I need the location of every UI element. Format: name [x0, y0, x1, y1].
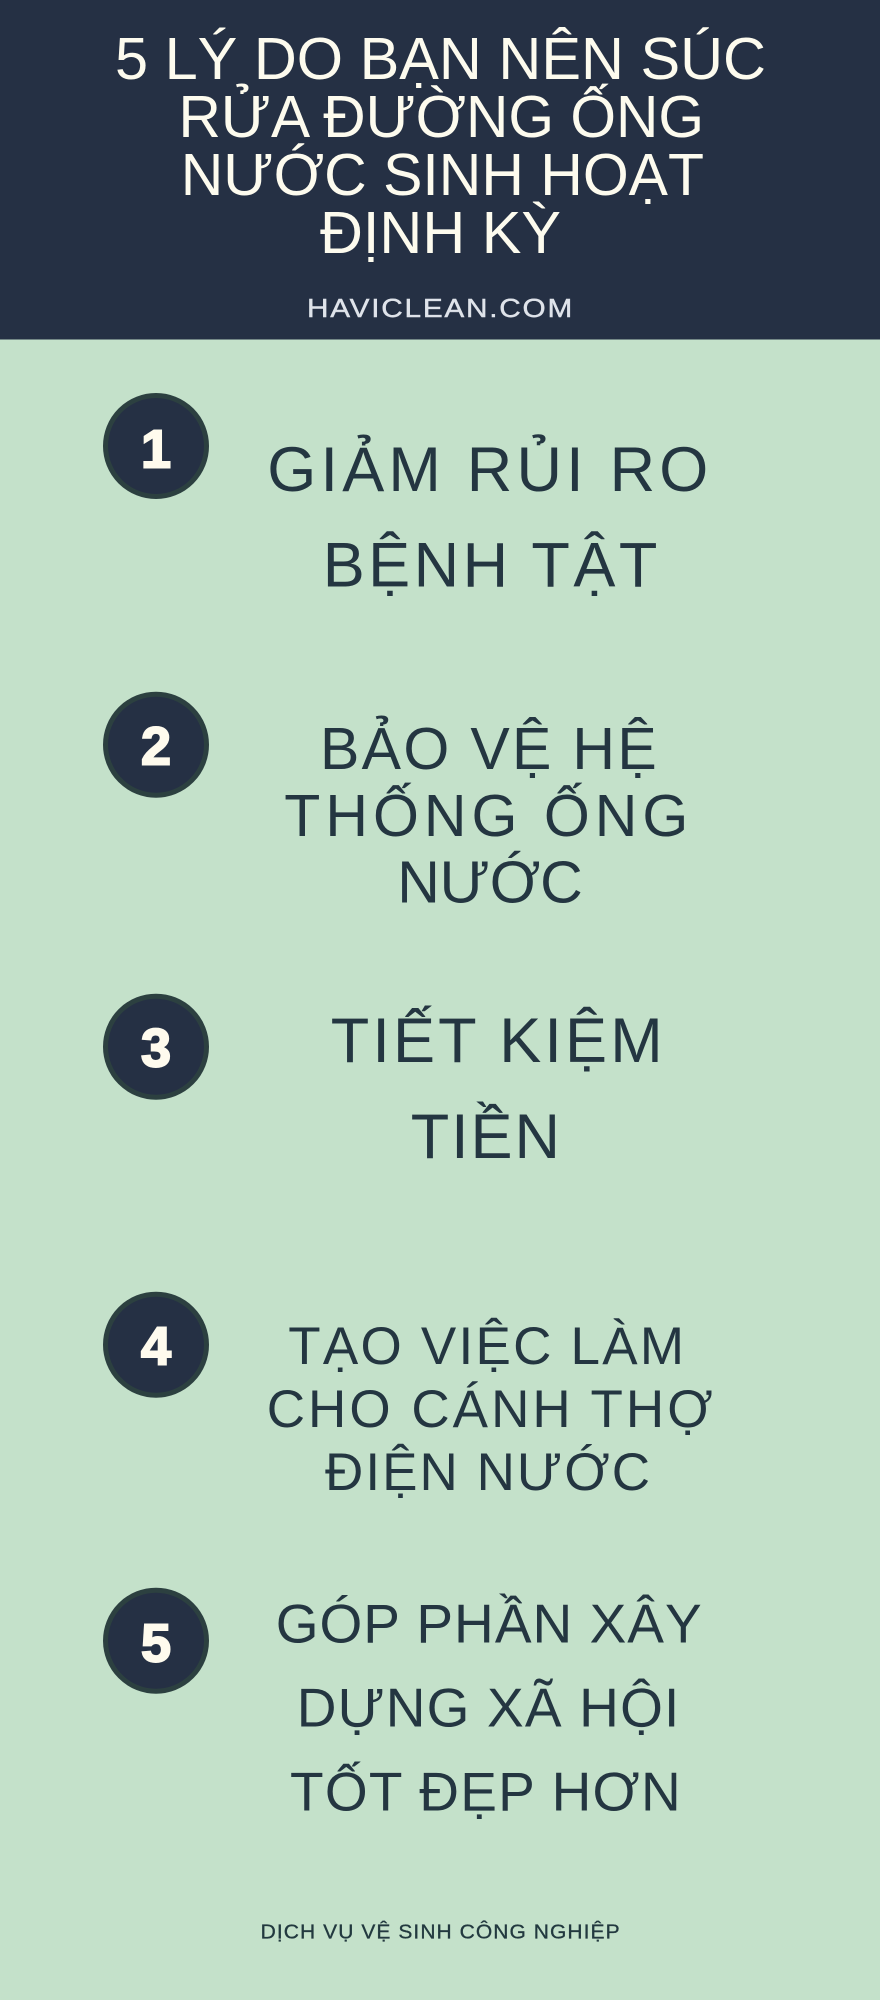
item 1 text: BỆNH TẬT: [323, 531, 657, 601]
item 4 text: ĐIỆN NƯỚC: [325, 1443, 650, 1502]
number badge 4: 4: [141, 1316, 171, 1376]
title: 5 LÝ DO BẠN NÊN SÚC: [115, 26, 766, 92]
header panel: [0, 0, 880, 340]
title: RỬA ĐƯỜNG ỐNG: [178, 83, 704, 150]
number badge 2: [106, 694, 206, 795]
item 1 text: [267, 434, 708, 601]
title: ĐỊNH KỲ: [320, 200, 561, 266]
item 3: [106, 996, 663, 1172]
item 2: [106, 694, 688, 916]
number badge 2: 2: [141, 716, 171, 776]
header band: [0, 0, 880, 340]
number badge 3: [106, 996, 206, 1097]
item 4: [106, 1294, 713, 1502]
item 4 text: CHO CÁNH THỢ: [267, 1380, 713, 1439]
item 3 text: TIẾT KIỆM: [331, 1005, 663, 1076]
number badge 3: 3: [141, 1018, 171, 1078]
item 2 text: THỐNG ỐNG: [284, 783, 688, 849]
item 4 text: TẠO VIỆC LÀM: [288, 1317, 684, 1376]
title: [115, 26, 766, 266]
item 2 text: [284, 715, 688, 916]
number badge 5: [106, 1590, 206, 1691]
item 5 text: DỰNG XÃ HỘI: [297, 1677, 679, 1739]
item 2 text: BẢO VỆ HỆ: [320, 715, 657, 782]
item 5 text: [276, 1593, 702, 1823]
footer text: DỊCH VỤ VỆ SINH CÔNG NGHIỆP: [261, 1921, 621, 1944]
item 2 text: NƯỚC: [397, 850, 583, 916]
number badge 5: 5: [141, 1614, 171, 1674]
title: NƯỚC SINH HOẠT: [181, 142, 704, 208]
number badge 4: [106, 1294, 206, 1395]
item 3 text: TIỀN: [411, 1101, 560, 1172]
website subtitle: HAVICLEAN.COM: [307, 295, 574, 323]
item 5 text: GÓP PHẦN XÂY: [276, 1593, 702, 1655]
item 1: [106, 396, 708, 601]
item 4 text: [267, 1317, 713, 1502]
item 1 text: GIẢM RỦI RO: [267, 434, 708, 505]
item 5: [106, 1590, 702, 1823]
item 3 text: [331, 1005, 663, 1172]
item 5 text: TỐT ĐẸP HƠN: [290, 1761, 681, 1823]
number badge 1: 1: [141, 420, 171, 480]
number badge 1: [106, 396, 206, 496]
